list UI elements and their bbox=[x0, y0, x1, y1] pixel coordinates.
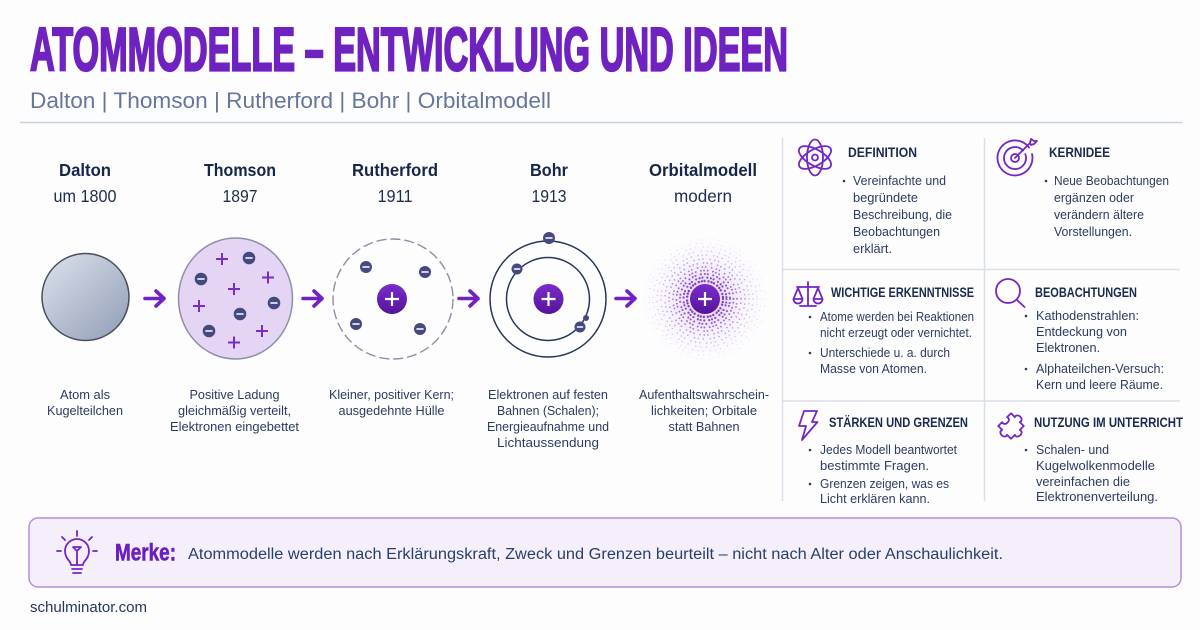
footer: schulminator.com bbox=[30, 600, 147, 616]
model headings: Rutherford bbox=[352, 160, 438, 180]
captions: Kleiner, positiver Kern; bbox=[329, 387, 454, 402]
captions: Aufenthaltswahrschein- bbox=[639, 387, 769, 402]
text: Vereinfachte und bbox=[853, 173, 946, 188]
model headings bbox=[54, 160, 757, 206]
text: Schalen- und bbox=[1036, 442, 1109, 457]
text: Masse von Atomen. bbox=[820, 361, 927, 376]
text: bestimmte Fragen. bbox=[820, 458, 929, 473]
text: begründete bbox=[853, 190, 918, 205]
label: Merke: bbox=[115, 540, 176, 566]
heading: DEFINITION bbox=[848, 145, 917, 160]
diagram: orbital cloud bbox=[641, 235, 769, 363]
model headings: um 1800 bbox=[54, 186, 117, 206]
arrow bbox=[616, 291, 635, 306]
captions: Kugelteilchen bbox=[47, 403, 123, 418]
text bbox=[809, 442, 957, 506]
text: Atome werden bei Reaktionen bbox=[820, 309, 974, 324]
model headings: Dalton bbox=[59, 160, 111, 180]
text: Beschreibung, die bbox=[853, 207, 952, 222]
text: nicht erzeugt oder vernichtet. bbox=[820, 325, 972, 340]
panel: Stärken und Grenzen bbox=[799, 411, 968, 506]
text: Entdeckung von bbox=[1036, 324, 1127, 339]
text: vereinfachen die bbox=[1036, 474, 1130, 489]
icon: scales bbox=[794, 282, 822, 306]
text bbox=[1025, 442, 1158, 504]
model headings: 1897 bbox=[222, 186, 258, 206]
captions: Bahnen (Schalen); bbox=[497, 403, 599, 418]
diagram: Bohr shells bbox=[490, 232, 606, 357]
text: Elektronen. bbox=[1036, 340, 1100, 355]
text: Neue Beobachtungen bbox=[1054, 173, 1169, 188]
heading: WICHTIGE ERKENNTNISSE bbox=[831, 285, 974, 300]
model headings: Bohr bbox=[530, 160, 568, 180]
panel: Wichtige Erkenntnisse bbox=[794, 282, 974, 376]
icon: lightning bbox=[799, 411, 818, 440]
model headings: Orbitalmodell bbox=[649, 160, 757, 180]
captions: Positive Ladung bbox=[190, 387, 280, 402]
icon: light bulb bbox=[57, 531, 97, 573]
icon: atom bbox=[795, 140, 835, 176]
heading: STÄRKEN UND GRENZEN bbox=[829, 415, 968, 430]
heading: BEOBACHTUNGEN bbox=[1035, 285, 1137, 300]
captions: lichkeiten; Orbitale bbox=[651, 403, 757, 418]
text: Vorstellungen. bbox=[1054, 224, 1132, 239]
text: Elektronenverteilung. bbox=[1036, 489, 1158, 504]
text: Licht erklären kann. bbox=[820, 491, 930, 506]
model headings: 1911 bbox=[378, 186, 412, 206]
model headings: Thomson bbox=[204, 160, 276, 180]
panel: Beobachtungen bbox=[996, 279, 1164, 392]
arrow bbox=[145, 291, 164, 306]
captions: ausgedehnte Hülle bbox=[338, 403, 444, 418]
diagram: Rutherford nucleus bbox=[333, 239, 453, 359]
captions: gleichmäßig verteilt, bbox=[178, 403, 291, 418]
text: ergänzen oder bbox=[1054, 190, 1135, 205]
captions: Elektronen auf festen bbox=[488, 387, 608, 402]
subtitle: Dalton | Thomson | Rutherford | Bohr | Orbitalmodell bbox=[30, 88, 551, 113]
text: Kathodenstrahlen: bbox=[1036, 308, 1139, 323]
text: Jedes Modell beantwortet bbox=[820, 442, 957, 457]
model headings: modern bbox=[674, 186, 732, 206]
message: Atommodelle werden nach Erklärungskraft, Zweck und Grenzen beurteilt – nicht nach Alter oder Anschaulichkeit. bbox=[188, 546, 1003, 563]
text: Kugelwolkenmodelle bbox=[1036, 458, 1155, 473]
model headings: 1913 bbox=[532, 186, 566, 206]
captions: statt Bahnen bbox=[668, 419, 740, 434]
diagram: Dalton sphere bbox=[42, 254, 129, 340]
captions: Lichtaussendung bbox=[497, 435, 599, 450]
captions: Elektronen eingebettet bbox=[170, 419, 299, 434]
arrow bbox=[459, 291, 478, 306]
text: Kern und leere Räume. bbox=[1036, 377, 1163, 392]
text: Alphateilchen-Versuch: bbox=[1036, 361, 1164, 376]
text bbox=[843, 173, 952, 256]
text bbox=[1045, 173, 1169, 239]
panel: atom model timeline bbox=[42, 160, 769, 450]
text: Grenzen zeigen, was es bbox=[820, 476, 949, 491]
icon: puzzle bbox=[995, 410, 1030, 445]
panel: Definition bbox=[795, 140, 952, 256]
text bbox=[1025, 308, 1164, 392]
heading: KERNIDEE bbox=[1049, 145, 1110, 160]
arrow bbox=[303, 291, 322, 306]
captions: Atom als bbox=[60, 387, 110, 402]
captions: Energieaufnahme und bbox=[487, 419, 609, 434]
text: Beobachtungen bbox=[853, 224, 940, 239]
callout: Merke bbox=[29, 518, 1181, 587]
text: Unterschiede u. a. durch bbox=[820, 345, 950, 360]
icon: magnifier bbox=[996, 279, 1024, 307]
icon: target bbox=[997, 139, 1037, 175]
text bbox=[809, 309, 974, 376]
diagram: Thomson plum pudding bbox=[178, 238, 292, 359]
text: erklärt. bbox=[853, 241, 892, 256]
captions bbox=[47, 387, 769, 450]
panel: Nutzung im Unterricht bbox=[995, 410, 1184, 504]
text: verändern ältere bbox=[1054, 207, 1144, 222]
panel: Kernidee bbox=[997, 139, 1169, 239]
